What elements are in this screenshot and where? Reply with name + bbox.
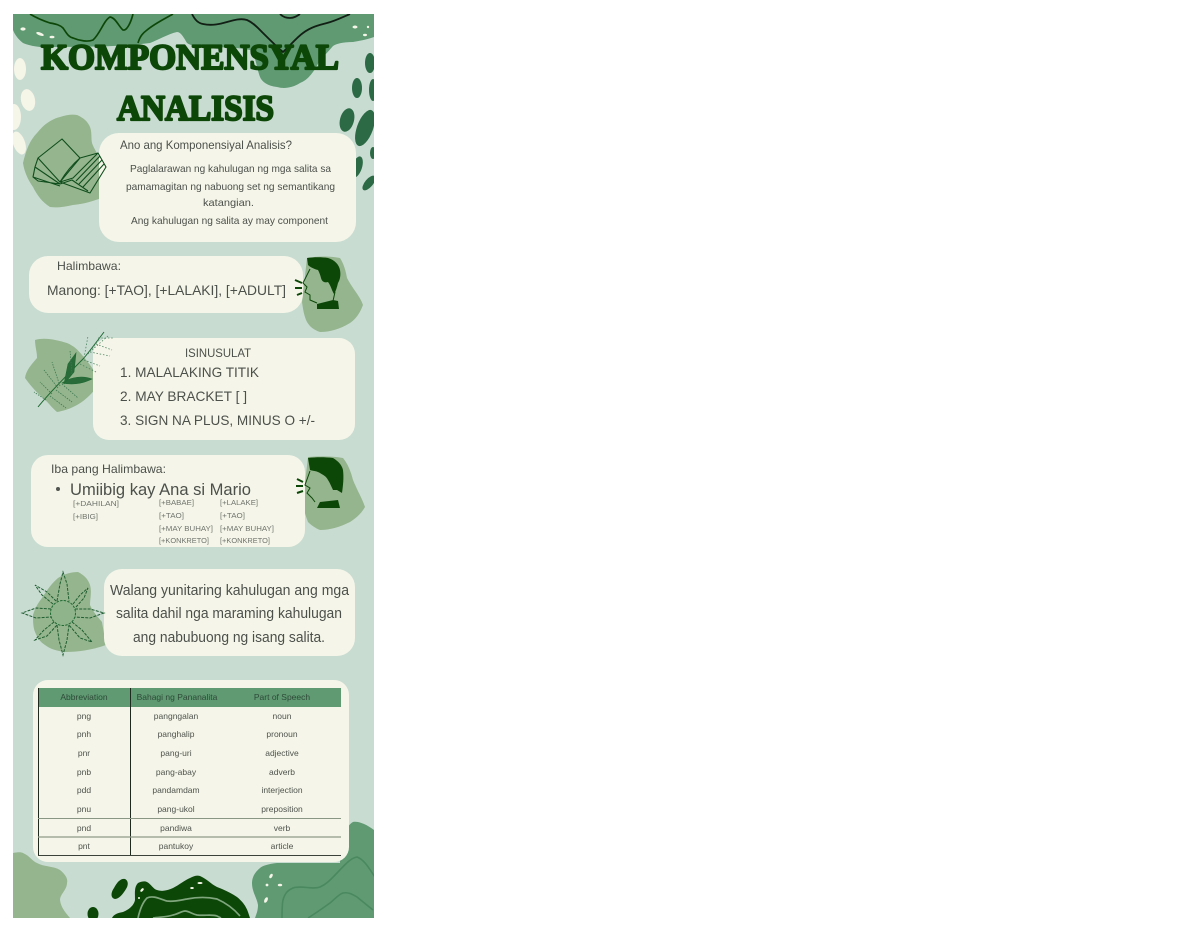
title bbox=[41, 37, 339, 128]
panel: example bbox=[29, 256, 303, 313]
title: KOMPONENSYAL bbox=[41, 37, 339, 77]
component column: mario: [+TAO] bbox=[220, 511, 245, 520]
note text: salita dahil nga maraming kahulugan bbox=[116, 606, 342, 622]
definition text: Paglalarawan ng kahulugan ng mga salita sa bbox=[130, 163, 331, 175]
table rows: pnu bbox=[77, 804, 91, 814]
note text bbox=[110, 583, 350, 646]
component column: umiibig: [+IBIG] bbox=[73, 512, 98, 521]
table header bbox=[38, 688, 341, 707]
table rows: preposition bbox=[261, 804, 303, 814]
table header: Part of Speech bbox=[254, 692, 310, 702]
table rows: adverb bbox=[269, 767, 295, 777]
note text: ang nabubuong ng isang salita. bbox=[133, 630, 325, 646]
numbered list: 1. MALALAKING TITIK bbox=[120, 364, 260, 380]
table rows: pandiwa bbox=[160, 823, 192, 833]
table rows: pnh bbox=[77, 729, 91, 739]
component column: mario: [+LALAKE] bbox=[220, 498, 258, 507]
definition text: Ang kahulugan ng salita ay may component bbox=[131, 215, 328, 227]
numbered list bbox=[120, 364, 315, 428]
heading: example: Halimbawa: bbox=[57, 259, 121, 273]
component column: umiibig: [+DAHILAN] bbox=[73, 499, 119, 508]
table rows: article bbox=[271, 841, 294, 851]
icon: blob behind sun bbox=[33, 572, 106, 652]
note text: Walang yunitaring kahulugan ang mga bbox=[110, 583, 350, 599]
definition text: pamamagitan ng nabuong set ng semantikang bbox=[126, 181, 335, 193]
decorative background shapes bbox=[7, 14, 379, 921]
icon: blob behind head bbox=[302, 256, 363, 332]
table rows: pnb bbox=[77, 767, 91, 777]
table header: Bahagi ng Pananalita bbox=[137, 692, 218, 702]
infographic background bbox=[13, 14, 374, 918]
icon: blob behind feather bbox=[25, 339, 100, 412]
table rows: pandamdam bbox=[152, 785, 200, 795]
table rows: pnt bbox=[78, 841, 91, 851]
table rows: interjection bbox=[261, 785, 303, 795]
icon: speaking head bbox=[295, 257, 340, 309]
heading: definition: Ano ang Komponensiyal Analisis? bbox=[120, 138, 292, 152]
icon: open book bbox=[33, 139, 106, 193]
example sentence: Umiibig kay Ana si Mario bbox=[70, 481, 251, 499]
table rows: verb bbox=[274, 823, 291, 833]
numbered list: 2. MAY BRACKET [ ] bbox=[120, 388, 247, 404]
table rows: png bbox=[77, 711, 91, 721]
component column: ana: [+BABAE] bbox=[159, 498, 194, 507]
table rows: pang-uri bbox=[160, 748, 192, 758]
example text: Manong: [+TAO], [+LALAKI], [+ADULT] bbox=[47, 282, 286, 298]
heading: isinusulat: ISINUSULAT bbox=[185, 346, 252, 360]
table rows: pronoun bbox=[266, 729, 298, 739]
panel: other example bbox=[31, 455, 305, 547]
table header: Abbreviation bbox=[60, 692, 108, 702]
icon: sun bbox=[22, 572, 104, 655]
icon: blob behind head 2 bbox=[303, 456, 365, 530]
definition text bbox=[126, 163, 335, 227]
table rows: adjective bbox=[265, 748, 299, 758]
title: ANALISIS bbox=[117, 88, 274, 128]
table rows: pang-ukol bbox=[157, 804, 195, 814]
component column: ana bbox=[159, 498, 213, 545]
table rows bbox=[77, 711, 303, 851]
component column: mario bbox=[220, 498, 274, 545]
table rows: pdd bbox=[77, 785, 91, 795]
panel: definition bbox=[99, 133, 356, 242]
table rows: pnr bbox=[78, 748, 90, 758]
icon: speaking head 2 bbox=[296, 457, 343, 508]
table rows: pnd bbox=[77, 823, 91, 833]
panel: how it is written bbox=[93, 338, 355, 440]
component column: ana: [+MAY BUHAY] bbox=[159, 524, 213, 533]
component column: mario: [+MAY BUHAY] bbox=[220, 524, 274, 533]
numbered list: 3. SIGN NA PLUS, MINUS O +/- bbox=[120, 412, 315, 428]
component column: mario: [+KONKRETO] bbox=[220, 536, 270, 545]
definition text: katangian. bbox=[203, 197, 254, 209]
panel: abbreviation table bbox=[33, 680, 349, 862]
panel: note bbox=[104, 569, 355, 656]
table rows: pang-abay bbox=[156, 767, 197, 777]
icon: feather bbox=[34, 332, 113, 408]
table grid bbox=[38, 688, 341, 856]
heading: other example: Iba pang Halimbawa: bbox=[51, 462, 166, 476]
table rows: noun bbox=[273, 711, 292, 721]
component column: ana: [+TAO] bbox=[159, 511, 184, 520]
component column: umiibig bbox=[73, 499, 119, 521]
table rows: panghalip bbox=[158, 729, 195, 739]
table rows: pantukoy bbox=[159, 841, 194, 851]
icon: blob behind book bbox=[23, 115, 104, 207]
table rows: pangngalan bbox=[154, 711, 198, 721]
component column: ana: [+KONKRETO] bbox=[159, 536, 209, 545]
